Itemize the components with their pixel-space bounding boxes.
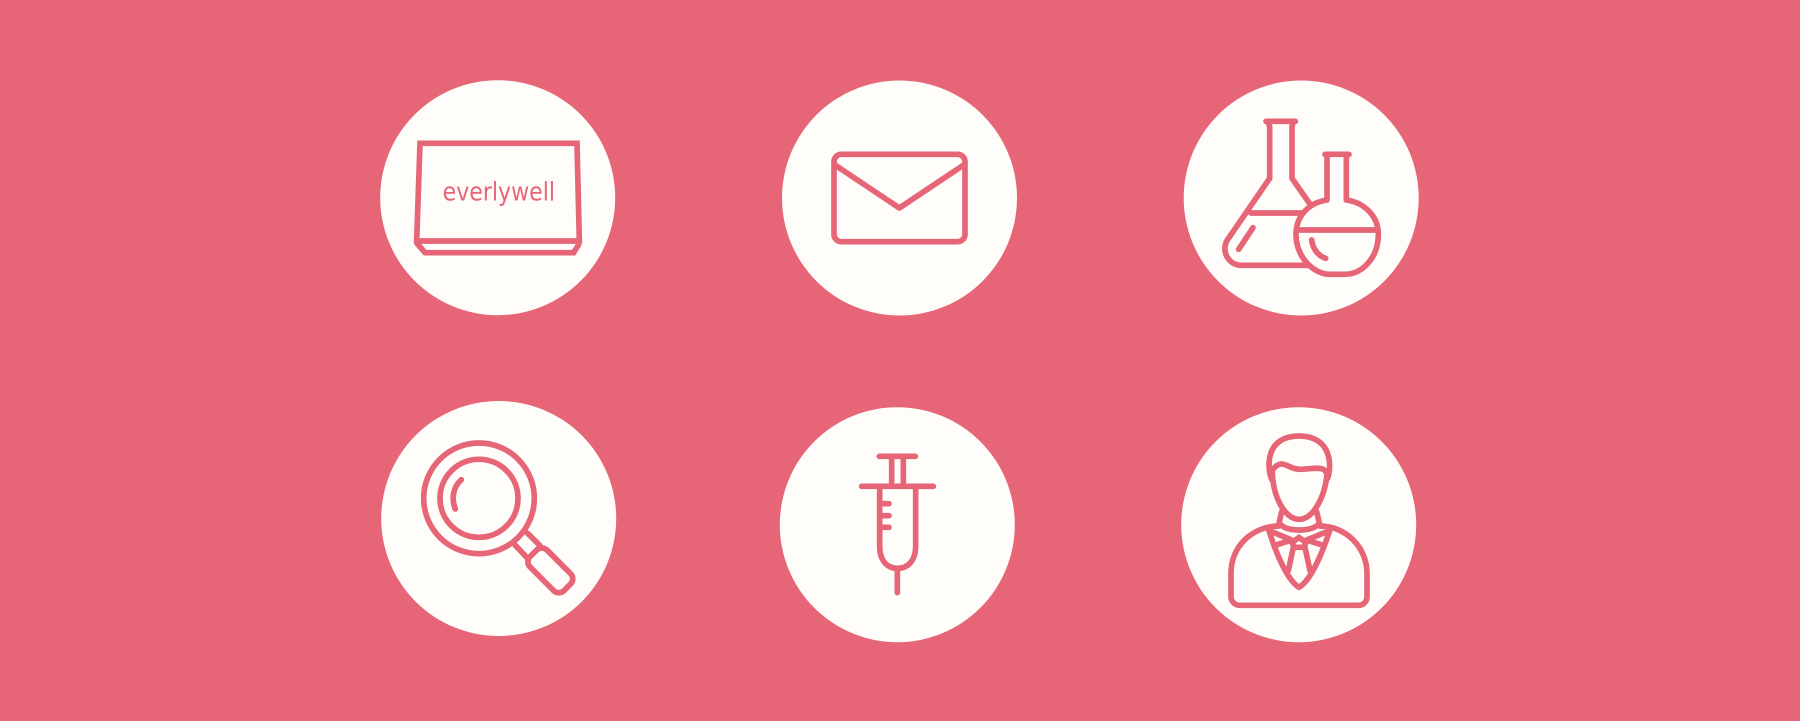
icon: envelope bbox=[834, 154, 965, 242]
badge: envelope bbox=[782, 80, 1017, 316]
badge: person in suit bbox=[1181, 407, 1416, 642]
badge: magnifying glass bbox=[381, 401, 616, 636]
icon: magnifying glass bbox=[424, 443, 576, 596]
icon: flasks bbox=[1225, 121, 1378, 274]
logo text: everlywell: everlywell bbox=[443, 176, 555, 206]
badge: lab flasks bbox=[1184, 80, 1419, 316]
icon: kit box bbox=[416, 143, 579, 253]
badge: everlywell test kit box bbox=[380, 80, 615, 315]
icon: person bbox=[1231, 436, 1367, 605]
badge: syringe bbox=[780, 407, 1015, 642]
icon: syringe bbox=[862, 456, 933, 593]
